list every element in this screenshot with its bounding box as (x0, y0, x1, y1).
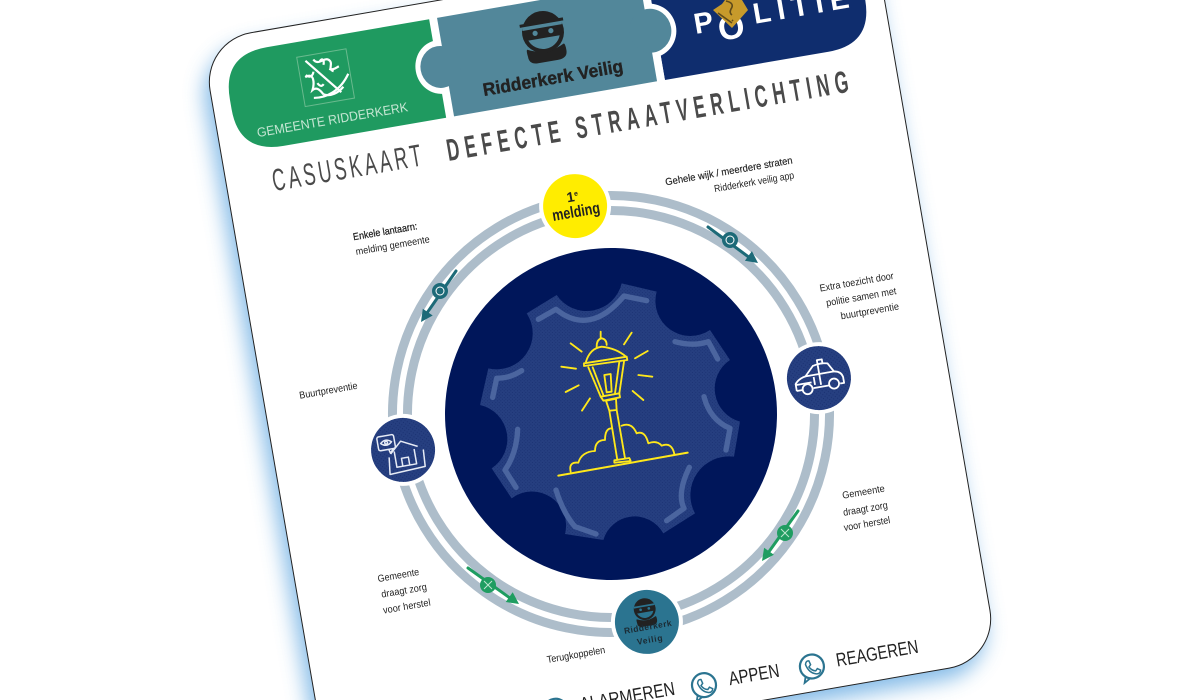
arrow: app alert (708, 227, 758, 263)
node: Ridderkerk Veilig (610, 585, 684, 659)
legend (542, 636, 921, 700)
icon: masked figure small (632, 596, 658, 628)
node: first report: 1 (565, 188, 576, 205)
label: whole neighbourhood: Gehele wijk / meerdere straten (665, 155, 794, 188)
icon: masked figure (518, 8, 570, 65)
label: neighbourhood watch: Buurtpreventie (299, 381, 359, 402)
arrow: repair right (762, 511, 798, 561)
label: extra supervision: Extra toezicht door (819, 271, 895, 295)
label: extra supervision (819, 271, 901, 325)
label: single lamp: Enkele lantaarn: (352, 221, 418, 243)
arrow: single lamp report (421, 271, 456, 322)
ring gaps (326, 129, 896, 699)
label: municipality repair right: draagt zorg (842, 500, 889, 519)
police wordmark: P (691, 6, 716, 41)
label: single lamp: melding gemeente (355, 234, 431, 258)
police wordmark (691, 0, 854, 53)
node: neighbourhood watch (366, 413, 440, 487)
icon: car (792, 356, 845, 396)
label: whole neighbourhood (665, 155, 796, 203)
arrow: repair left (468, 568, 519, 604)
label: municipality repair right: voor herstel (843, 515, 891, 534)
police wordmark: O (715, 7, 748, 49)
icon: police crest (713, 0, 748, 28)
node: first report (538, 169, 612, 243)
label: single lamp (352, 220, 431, 258)
centre disc (419, 222, 803, 606)
legend: appen: APPEN (727, 661, 781, 690)
label: municipality repair right: Gemeente (841, 484, 886, 502)
title: DEFECTE STRAATVERLICHTING (444, 65, 851, 168)
title (270, 65, 851, 198)
label: report back: Terugkoppelen (546, 645, 606, 666)
card shadow (197, 0, 993, 700)
legend: alarmeren (542, 678, 677, 700)
label: municipality repair right (838, 484, 892, 534)
header: Ridderkerk Veilig puzzle panel (407, 0, 685, 121)
title: CASUSKAART (270, 139, 424, 198)
icon: street lamp (558, 332, 688, 476)
node: first report: melding (551, 200, 601, 225)
header: police panel (648, 0, 873, 80)
card (202, 0, 998, 700)
node: first report: e (574, 190, 579, 198)
process ring (358, 161, 864, 667)
label: extra supervision: buurtpreventie (840, 301, 900, 322)
label: municipality repair left (377, 566, 431, 617)
centre illustration (480, 283, 740, 540)
municipality name: GEMEENTE RIDDERKERK (256, 99, 409, 140)
label: municipality repair left: voor herstel (382, 598, 431, 617)
header: municipality panel (222, 19, 446, 153)
label: extra supervision: politie samen met (825, 286, 897, 309)
legend: reageren (798, 636, 921, 683)
legend: appen (690, 660, 782, 700)
label: municipality repair left: draagt zorg (381, 582, 428, 601)
label: municipality repair left: Gemeente (377, 567, 420, 585)
legend: reageren: REAGEREN (835, 637, 920, 672)
node: police car (782, 341, 856, 415)
icon: house with eye (377, 430, 427, 476)
municipal crest (297, 49, 354, 107)
panel name: Ridderkerk Veilig (481, 56, 625, 100)
node: Ridderkerk Veilig: Veilig (636, 632, 664, 647)
node: Ridderkerk Veilig: Ridderkerk (623, 618, 673, 636)
labels (273, 142, 950, 700)
label: whole neighbourhood: Ridderkerk veilig app (713, 170, 795, 195)
gear shape (480, 283, 740, 540)
